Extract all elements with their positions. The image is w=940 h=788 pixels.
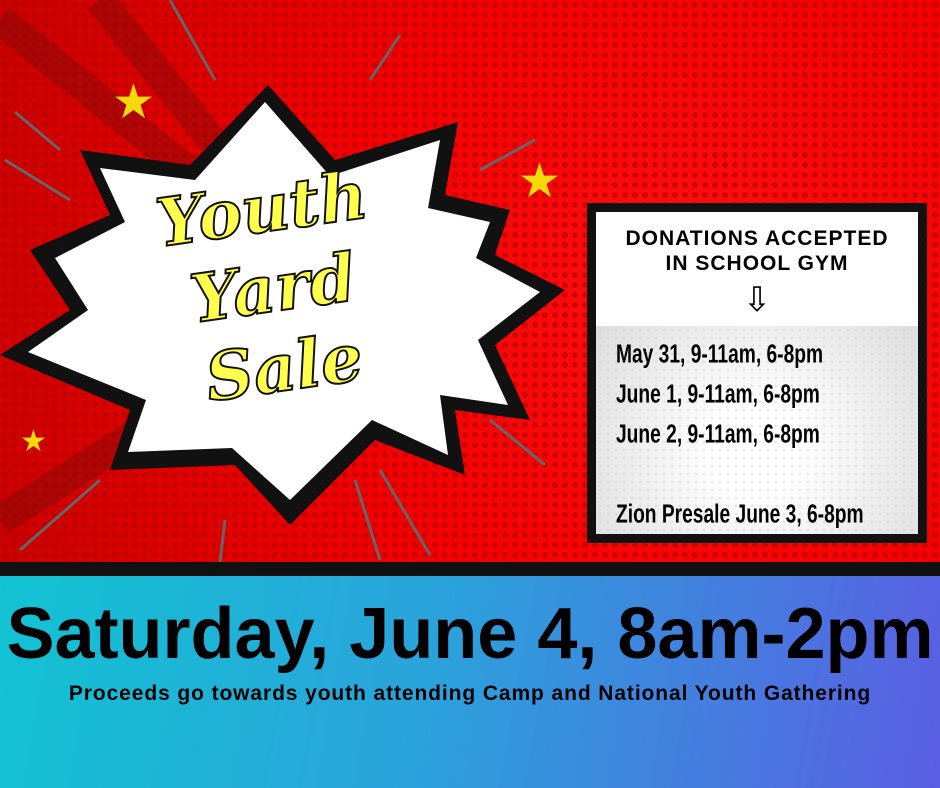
background: red comic panel <box>0 0 940 562</box>
dates list: Zion Presale June 3, 6-8pm <box>616 500 864 529</box>
dates list: June 2, 9-11am, 6-8pm <box>616 420 820 449</box>
title: Youth Yard Sale: Sale <box>201 318 367 417</box>
arrow: down: ⇩ <box>743 281 771 319</box>
footer: date banner <box>0 576 940 788</box>
proceeds note: Proceeds go towards youth attending Camp and National Youth Gathering <box>69 682 871 705</box>
title: Youth Yard Sale: Yard <box>185 238 360 338</box>
heading: donations accepted: IN SCHOOL GYM <box>666 252 848 275</box>
heading: donations accepted: DONATIONS ACCEPTED <box>625 227 888 250</box>
heading: donations accepted <box>625 227 888 275</box>
icon: stars: ★ <box>518 155 561 208</box>
panel: donations <box>587 203 927 543</box>
dates list: May 31, 9-11am, 6-8pm <box>616 340 823 369</box>
icon: stars <box>20 76 561 458</box>
dates list: June 1, 9-11am, 6-8pm <box>616 380 820 409</box>
title: Youth Yard Sale: Youth <box>151 156 372 262</box>
black divider band <box>0 562 940 576</box>
icon: stars: ★ <box>112 76 155 129</box>
icon: stars: ★ <box>20 425 47 458</box>
burst: speech explosion <box>0 85 565 525</box>
main date: Saturday, June 4, 8am-2pm <box>6 594 934 674</box>
dates list <box>596 326 918 534</box>
title: Youth Yard Sale <box>151 156 372 417</box>
